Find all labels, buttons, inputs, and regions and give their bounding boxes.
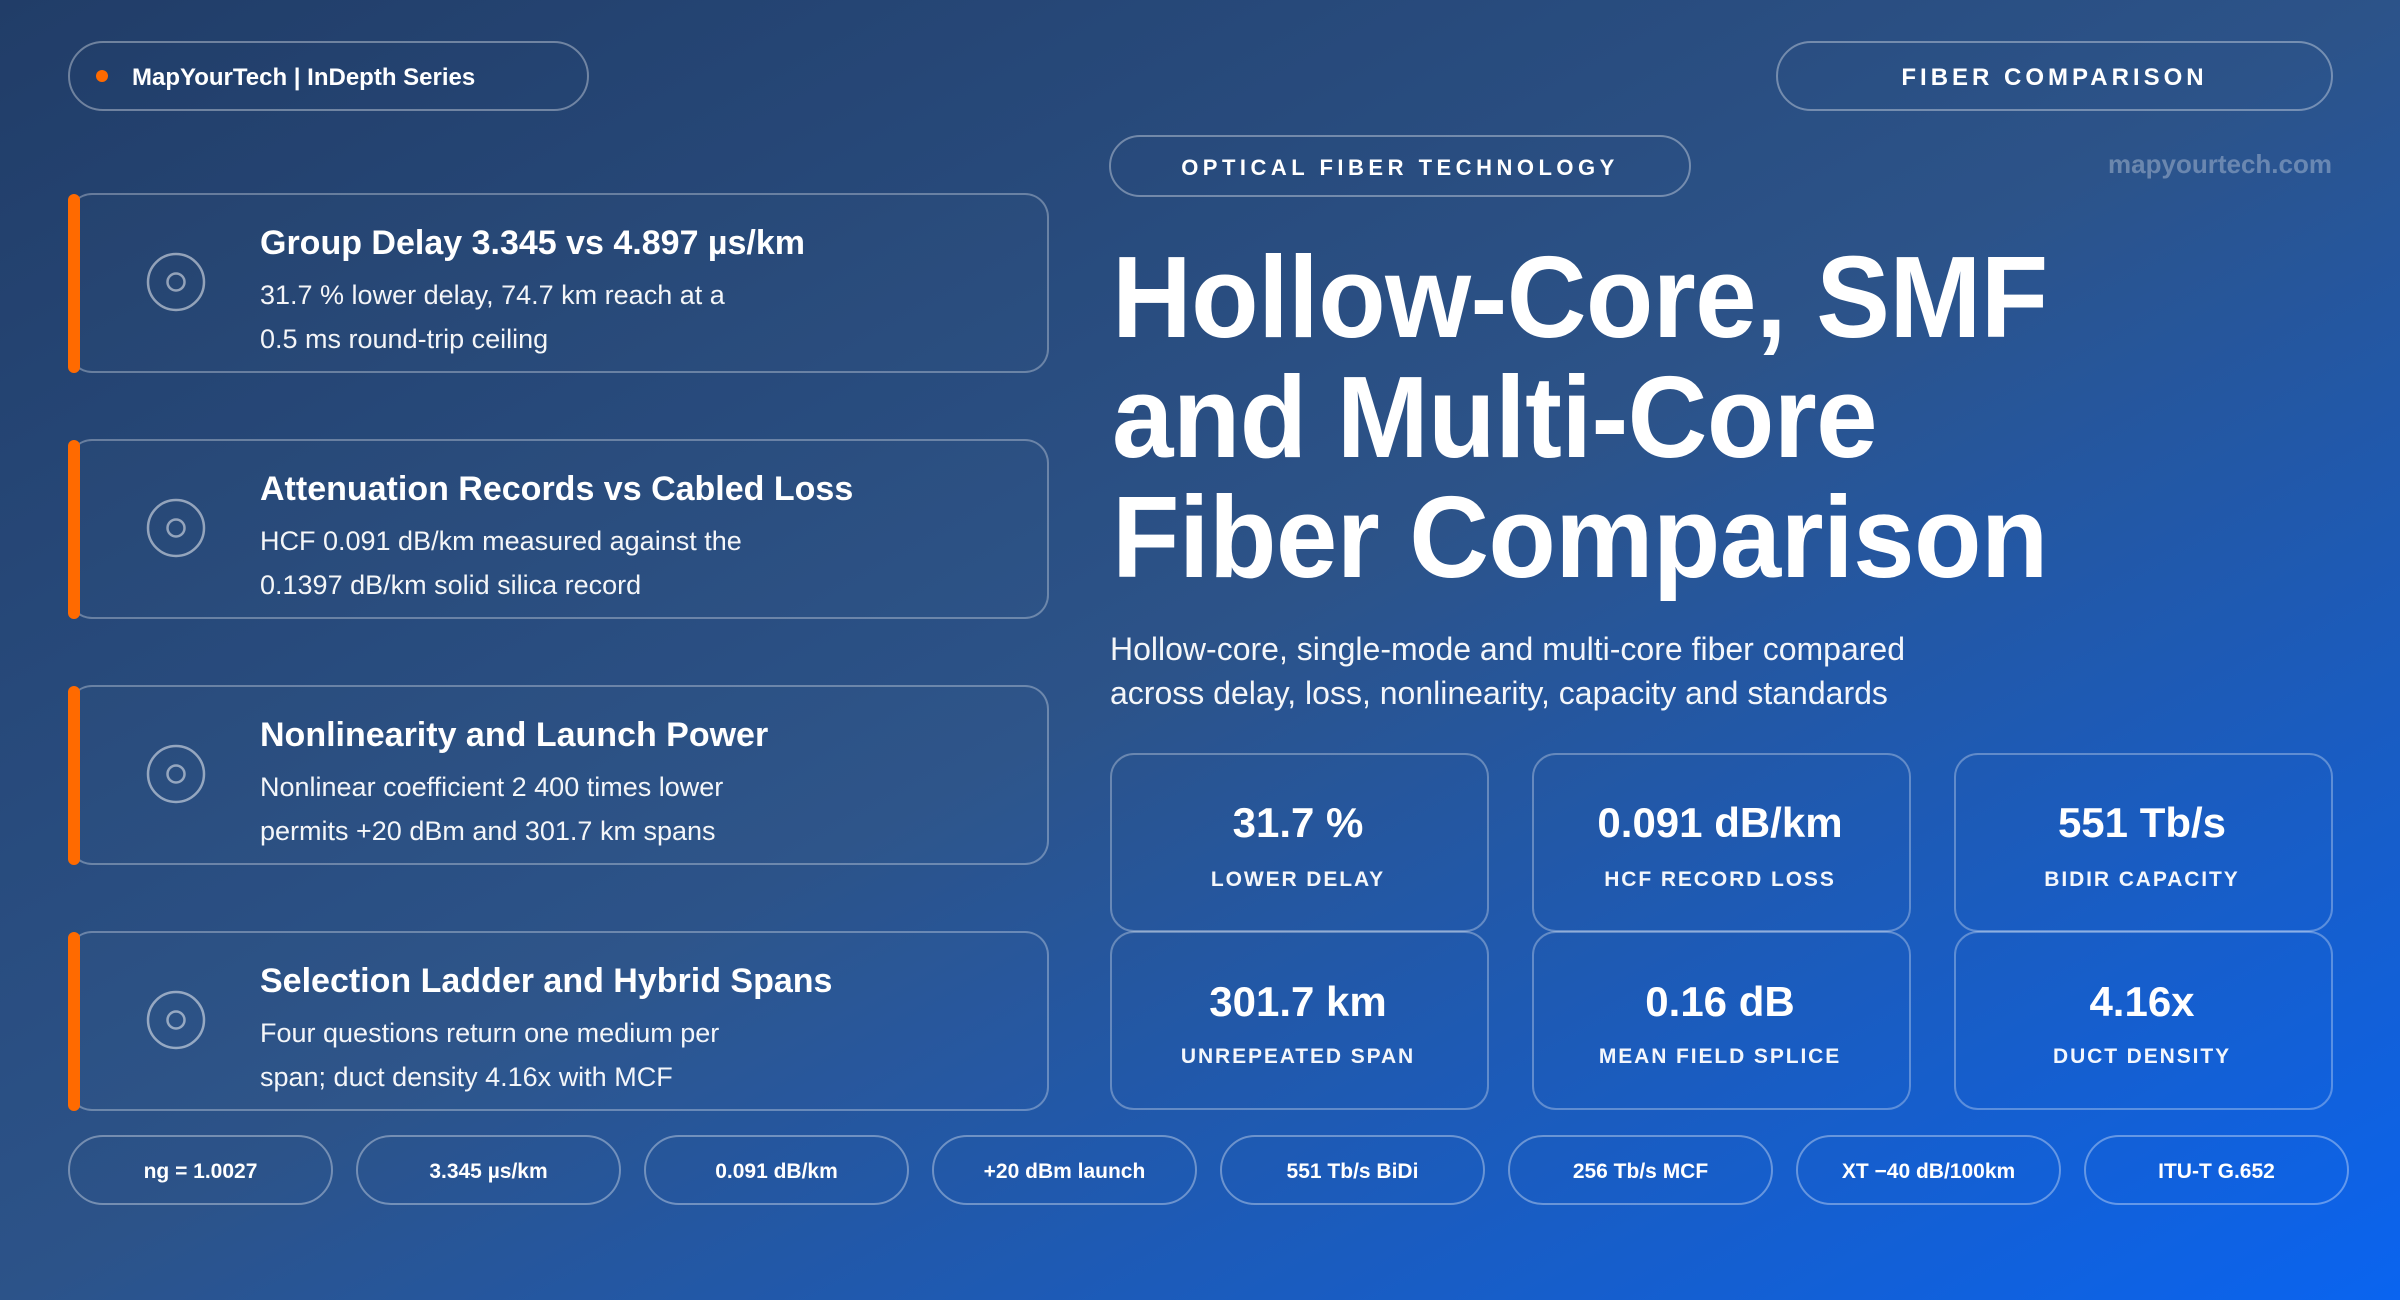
heading: Selection Ladder and Hybrid Spans — [260, 962, 832, 1000]
text block: 0.5 ms round-trip ceiling — [260, 324, 548, 354]
text block — [260, 772, 723, 846]
badge: series — [68, 41, 589, 111]
chip: crosstalk: XT −40 dB/100km — [1842, 1160, 2015, 1182]
chip: loss — [644, 1135, 909, 1205]
chip: ng: ng = 1.0027 — [144, 1160, 257, 1182]
chip: bidi — [1220, 1135, 1485, 1205]
accent bar — [68, 194, 80, 373]
text block: HCF 0.091 dB/km measured against the — [260, 526, 742, 556]
label: BIDIR CAPACITY — [2044, 868, 2240, 891]
text block: Four questions return one medium per — [260, 1018, 719, 1048]
subtitle: across delay, loss, nonlinearity, capacity and standards — [1110, 675, 1888, 711]
stat: splice — [1532, 931, 1911, 1110]
subtitle — [1110, 631, 1905, 711]
badge: fiber comparison — [1776, 41, 2333, 111]
chip: ng — [68, 1135, 333, 1205]
icon: orange dot — [96, 70, 108, 82]
chip: bidi: 551 Tb/s BiDi — [1287, 1160, 1418, 1182]
panel: selection ladder — [68, 931, 1049, 1111]
chip: launch — [932, 1135, 1197, 1205]
badge: optical fiber technology — [1109, 135, 1691, 197]
icon: target ring — [146, 252, 206, 312]
subtitle: Hollow-core, single-mode and multi-core fiber compared — [1110, 631, 1905, 667]
stat: lower delay — [1110, 753, 1489, 932]
value: 551 Tb/s — [2058, 799, 2226, 846]
chip: mcf — [1508, 1135, 1773, 1205]
chip: mcf: 256 Tb/s MCF — [1573, 1160, 1708, 1182]
value: 4.16x — [2089, 978, 2195, 1025]
chip: delay: 3.345 µs/km — [429, 1160, 548, 1182]
heading: Group Delay 3.345 vs 4.897 µs/km — [260, 224, 805, 262]
title: Fiber Comparison — [1112, 472, 2048, 602]
text block: 0.1397 dB/km solid silica record — [260, 570, 641, 600]
value: 31.7 % — [1233, 799, 1363, 846]
stat: record loss — [1532, 753, 1911, 932]
value: 0.091 dB/km — [1597, 799, 1843, 846]
title: and Multi-Core — [1112, 352, 1877, 482]
icon: target ring — [146, 498, 206, 558]
heading: Attenuation Records vs Cabled Loss — [260, 470, 853, 508]
panel: attenuation — [68, 439, 1049, 619]
chip: loss: 0.091 dB/km — [715, 1160, 838, 1182]
text block — [260, 280, 725, 354]
accent bar — [68, 440, 80, 619]
panel: group delay — [68, 193, 1049, 373]
heading: Nonlinearity and Launch Power — [260, 716, 768, 754]
label: MEAN FIELD SPLICE — [1599, 1045, 1841, 1068]
accent bar — [68, 932, 80, 1111]
title — [1112, 232, 2048, 602]
value: 301.7 km — [1209, 978, 1387, 1025]
badge text: MapYourTech | InDepth Series — [132, 64, 475, 90]
text block: Nonlinear coefficient 2 400 times lower — [260, 772, 723, 802]
value: 0.16 dB — [1645, 978, 1795, 1025]
chip: standard — [2084, 1135, 2349, 1205]
chip: launch: +20 dBm launch — [984, 1160, 1145, 1182]
stat: unrepeated span — [1110, 931, 1489, 1110]
text block: permits +20 dBm and 301.7 km spans — [260, 816, 716, 846]
icon: target ring — [146, 744, 206, 804]
accent bar — [68, 686, 80, 865]
text block — [260, 1018, 719, 1092]
stat: duct density — [1954, 931, 2333, 1110]
label: HCF RECORD LOSS — [1604, 868, 1836, 891]
badge: optical fiber technology: OPTICAL FIBER TECHNOLOGY — [1181, 155, 1619, 180]
chip: standard: ITU-T G.652 — [2158, 1160, 2275, 1182]
stat: bidir capacity — [1954, 753, 2333, 932]
label: DUCT DENSITY — [2053, 1045, 2231, 1068]
panel: nonlinearity — [68, 685, 1049, 865]
label: LOWER DELAY — [1211, 868, 1385, 891]
icon: target ring — [146, 990, 206, 1050]
label: UNREPEATED SPAN — [1181, 1045, 1415, 1068]
watermark: mapyourtech.com — [2108, 149, 2332, 179]
title: Hollow-Core, SMF — [1112, 232, 2048, 362]
chip: crosstalk — [1796, 1135, 2061, 1205]
text block: span; duct density 4.16x with MCF — [260, 1062, 673, 1092]
text block — [260, 526, 742, 600]
badge: fiber comparison: FIBER COMPARISON — [1901, 64, 2208, 90]
text block: 31.7 % lower delay, 74.7 km reach at a — [260, 280, 725, 310]
chip: delay — [356, 1135, 621, 1205]
